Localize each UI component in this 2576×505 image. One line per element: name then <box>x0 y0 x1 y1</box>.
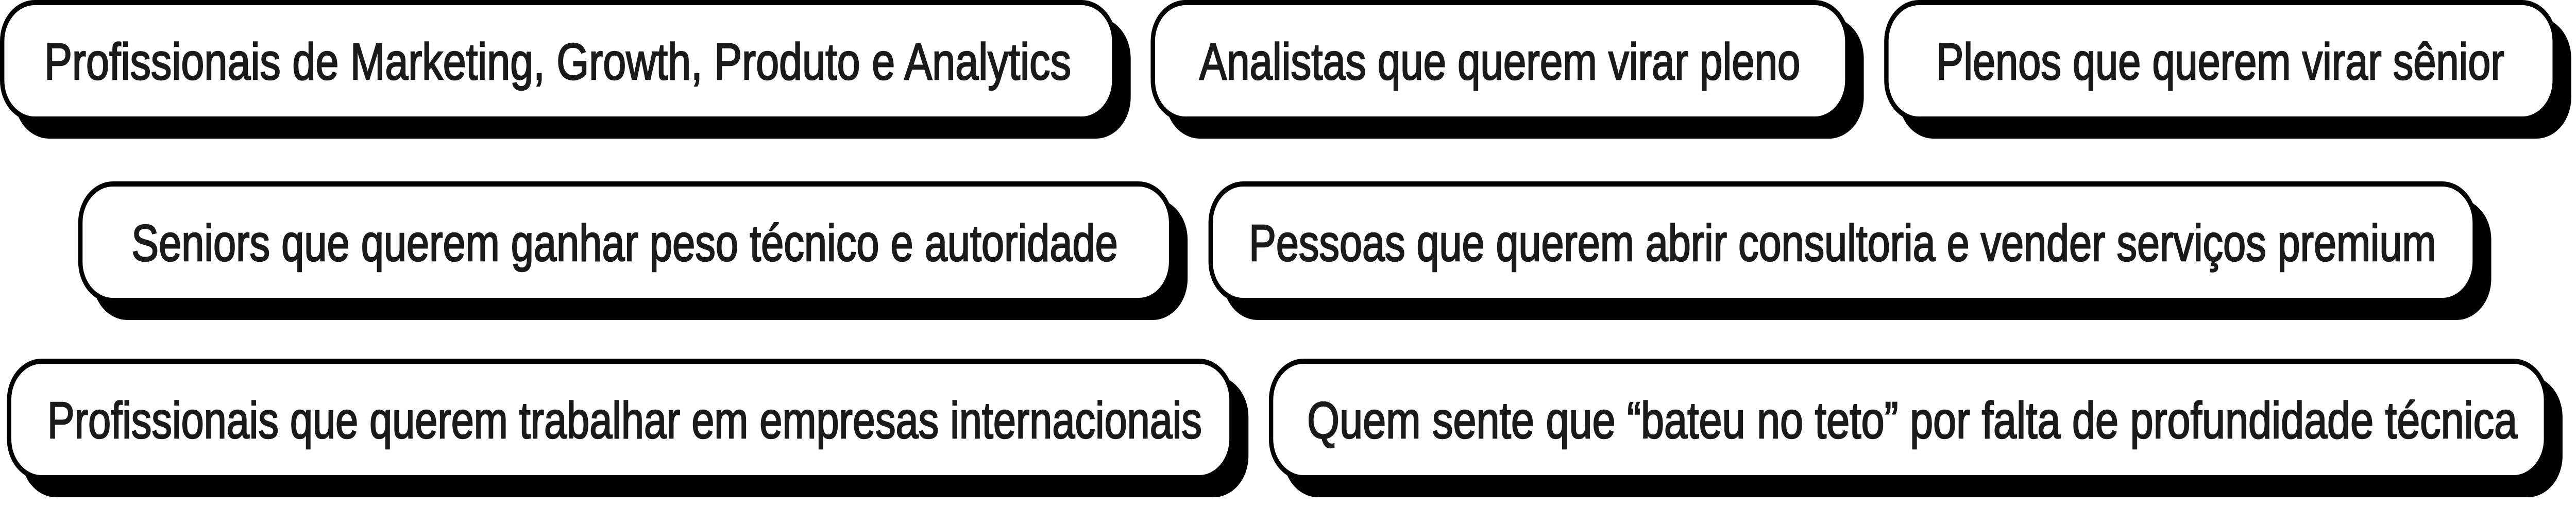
pill box <box>1271 361 2546 478</box>
pill: Analistas que querem virar pleno <box>1153 3 1864 139</box>
pill: Profissionais que querem trabalhar em empresas internacionais <box>9 361 1248 497</box>
pill text: Pessoas que querem abrir consultoria e vender serviços premium <box>1249 214 2436 272</box>
pill text: Seniors que querem ganhar peso técnico e autoridade <box>131 214 1118 272</box>
pill: Pessoas que querem abrir consultoria e vender serviços premium <box>1211 184 2492 320</box>
pill shadow <box>21 376 1248 497</box>
pill box <box>80 184 1171 300</box>
pill box <box>1211 184 2475 300</box>
pill shadow <box>1283 376 2563 497</box>
pill text: Plenos que querem virar sênior <box>1936 32 2504 91</box>
pill: Seniors que querem ganhar peso técnico e autoridade <box>80 184 1188 320</box>
pill shadow <box>1899 17 2571 139</box>
pill shadow <box>93 198 1188 320</box>
pill text: Profissionais de Marketing, Growth, Produto e Analytics <box>44 32 1071 91</box>
pill text: Profissionais que querem trabalhar em empresas internacionais <box>47 391 1202 449</box>
pill shadow <box>14 17 1131 139</box>
pill box <box>1153 3 1848 119</box>
pill box <box>1886 3 2555 119</box>
pill: Plenos que querem virar sênior <box>1886 3 2571 139</box>
pill text: Quem sente que “bateu no teto” por falta de profundidade técnica <box>1307 391 2518 449</box>
pill box <box>2 3 1114 119</box>
pill: Profissionais de Marketing, Growth, Produto e Analytics <box>2 3 1131 139</box>
pill text: Analistas que querem virar pleno <box>1199 32 1800 91</box>
pill shadow <box>1165 17 1864 139</box>
pill shadow <box>1223 198 2492 320</box>
pill: Quem sente que “bateu no teto” por falta de profundidade técnica <box>1271 361 2563 497</box>
pill box <box>9 361 1231 478</box>
